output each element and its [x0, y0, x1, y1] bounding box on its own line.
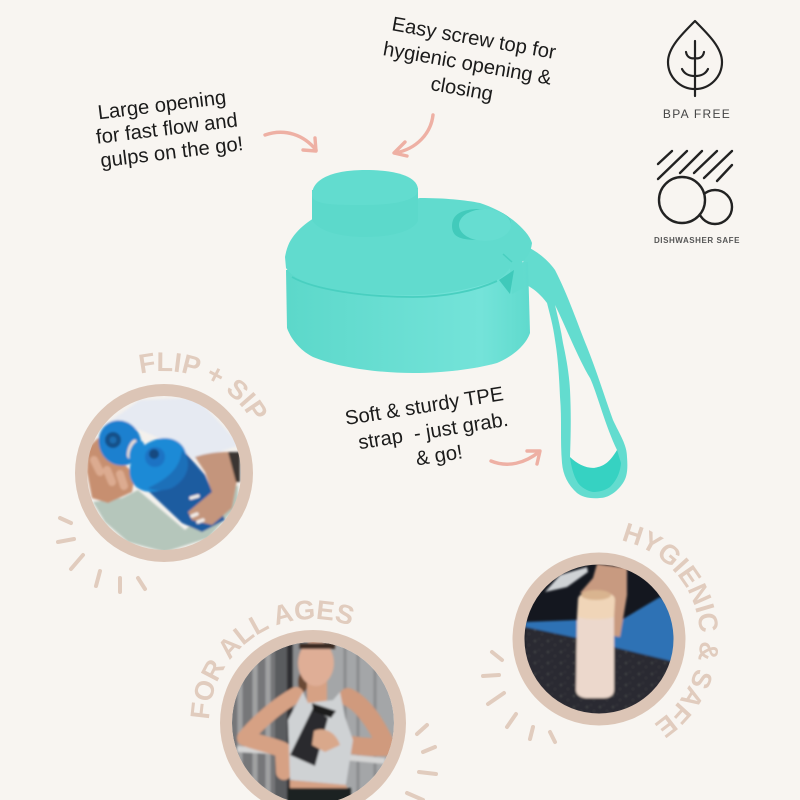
label: BPA free: BPA FREE: [663, 107, 731, 121]
neck: [307, 680, 327, 705]
curved heading: flip + sip: FLIP + SIP: [139, 352, 266, 416]
right hand: [188, 452, 238, 525]
note: easy screw top: Easy screw top for: [390, 13, 558, 64]
photo: hygienic & safe: [518, 558, 680, 720]
arrow: to strap: [491, 451, 540, 464]
speckled floor: [525, 627, 675, 718]
note: easy screw top: [377, 13, 558, 115]
ring: [518, 558, 680, 720]
lid: [285, 198, 532, 295]
curved heading: hygienic & safe: HYGIENIC & SAFE: [622, 523, 718, 738]
shirt: [105, 398, 240, 460]
note: large opening: [92, 85, 244, 173]
note: large opening: Large opening: [97, 87, 227, 124]
bar: [237, 749, 385, 761]
head: [298, 640, 334, 686]
note: large opening: for fast flow and: [95, 110, 239, 149]
latch: [452, 209, 511, 240]
ring: [226, 636, 400, 800]
icon: BPA free leaf: [668, 21, 722, 96]
ring: [81, 390, 247, 556]
top spout cap: [312, 188, 418, 237]
icon: dishwasher safe: [658, 151, 732, 224]
note: easy screw top: hygienic opening &: [381, 38, 554, 90]
tank top: [288, 692, 353, 785]
label: dishwasher safe: DISHWASHER SAFE: [654, 236, 740, 245]
strap: [520, 246, 627, 498]
lower body: [286, 262, 530, 373]
arms: [245, 695, 296, 772]
ticks: hygienic & safe: [483, 652, 555, 742]
hand: [580, 564, 627, 637]
curved heading: for all ages: FOR ALL AGES: [190, 600, 354, 718]
arrow: to large opening: [265, 132, 316, 151]
ticks: for all ages: [407, 725, 436, 800]
note: soft strap: Soft & sturdy TPE: [343, 383, 505, 430]
note: soft strap: strap - just grab.: [357, 409, 510, 454]
gym background: [232, 651, 276, 795]
note: soft strap: [343, 383, 514, 480]
lid: [97, 419, 142, 467]
arrow: to screw top: [394, 115, 433, 156]
ticks: flip + sip: [58, 518, 145, 592]
note: easy screw top: closing: [429, 73, 495, 106]
leggings: [93, 485, 238, 552]
bottle shoulder: [128, 436, 187, 494]
photo: for all ages: [226, 635, 400, 800]
white cloth: [545, 567, 588, 592]
product: teal flip cap: [285, 170, 627, 498]
black bottle: [290, 708, 328, 766]
left hand: [87, 438, 135, 503]
bottle: [145, 445, 225, 532]
note: soft strap: & go!: [414, 441, 464, 470]
note: large opening: gulps on the go!: [99, 133, 244, 172]
hair: [298, 672, 308, 692]
cream bottle: [576, 616, 614, 698]
photo: flip + sip: [80, 390, 250, 560]
blue mat: [525, 597, 675, 662]
